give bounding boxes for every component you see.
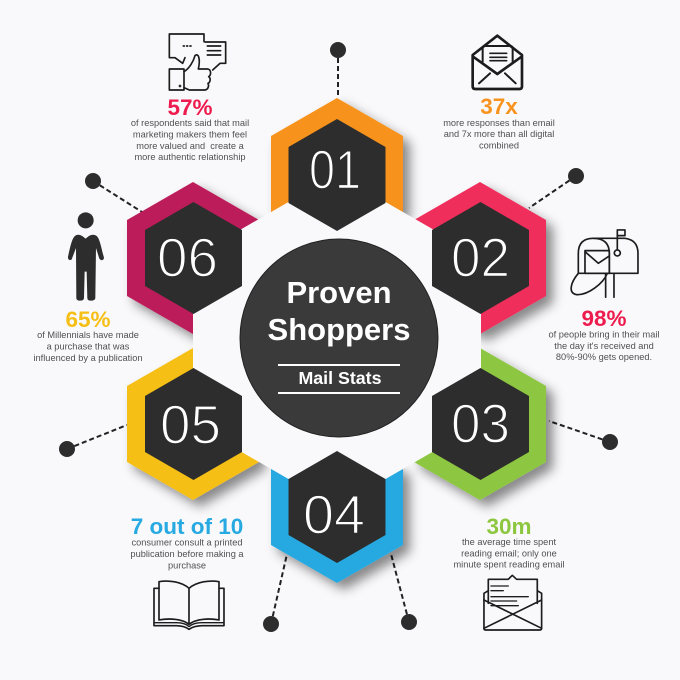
- stat 98%: 80%-90% gets opened.: [556, 352, 652, 362]
- subtitle: Mail Stats: [298, 368, 382, 388]
- stat 98%: the day it's received and: [554, 341, 654, 351]
- stat 57%: more valued and create a: [136, 141, 245, 151]
- stat 57%: marketing makers them feel: [133, 130, 247, 140]
- icon: open book: [154, 581, 224, 629]
- hexagon 04: [288, 451, 386, 563]
- stat 65%: influenced by a publication: [33, 353, 143, 363]
- stat 30m: [453, 514, 565, 570]
- icon: envelope with letter: [484, 575, 542, 630]
- stat 37x: and 7x more than all digital: [444, 129, 554, 139]
- hexagon 01: 01: [309, 138, 361, 200]
- stat 30m: the average time spent: [462, 537, 556, 547]
- icon: person: [68, 212, 104, 301]
- stat 37x: more responses than email: [443, 118, 555, 128]
- hexagon 03: [432, 368, 529, 480]
- hexagon 02: 02: [451, 226, 510, 288]
- hexagon 04: 04: [303, 484, 365, 546]
- stat 37x: 37x: [480, 94, 518, 119]
- hexagon 06: 06: [157, 226, 218, 288]
- stat 65%: [33, 307, 143, 363]
- stat 30m: 30m: [486, 514, 532, 539]
- icon: mailbox: [571, 230, 638, 297]
- stat 37x: [443, 94, 555, 150]
- stat 7 out of 10: purchase: [168, 560, 206, 570]
- hexagon 01: [288, 119, 386, 231]
- stat 57%: 57%: [167, 95, 213, 120]
- hexagon 06: [145, 202, 242, 314]
- hexagon 03: 03: [451, 392, 510, 454]
- coloured hexagon rings: [127, 98, 546, 583]
- stat 65%: a purchase that was: [47, 342, 130, 352]
- stat 98%: 98%: [581, 306, 627, 331]
- stat 65%: of Millennials have made: [37, 330, 139, 340]
- stat 98%: [548, 306, 660, 362]
- hexagon 05: 05: [160, 394, 221, 456]
- stat 7 out of 10: consumer consult a printed: [131, 538, 243, 548]
- connector lines and dots: [59, 42, 618, 632]
- stat 57%: of respondents said that mail: [131, 118, 249, 128]
- stat 37x: combined: [479, 140, 519, 150]
- stat 7 out of 10: publication before making a: [130, 549, 244, 559]
- stat 98%: of people bring in their mail: [548, 330, 660, 340]
- stat 30m: minute spent reading email: [453, 560, 565, 570]
- stat 7 out of 10: 7 out of 10: [131, 514, 243, 539]
- icon: open envelope with letter: [473, 36, 522, 89]
- stat 7 out of 10: [130, 514, 244, 570]
- hexagon 05: [145, 368, 242, 480]
- hexagon 02: [432, 202, 529, 314]
- centre circle with title: [240, 239, 438, 437]
- stat 65%: 65%: [65, 307, 111, 332]
- title: Proven: [286, 275, 392, 310]
- stat 57%: [131, 95, 249, 162]
- stat 30m: reading email; only one: [461, 548, 557, 558]
- stat 57%: more authentic relationship: [134, 152, 246, 162]
- central light hexagon: [193, 174, 481, 507]
- icon: chat bubbles and thumbs up: [169, 34, 226, 90]
- title second line: Shoppers: [268, 312, 410, 347]
